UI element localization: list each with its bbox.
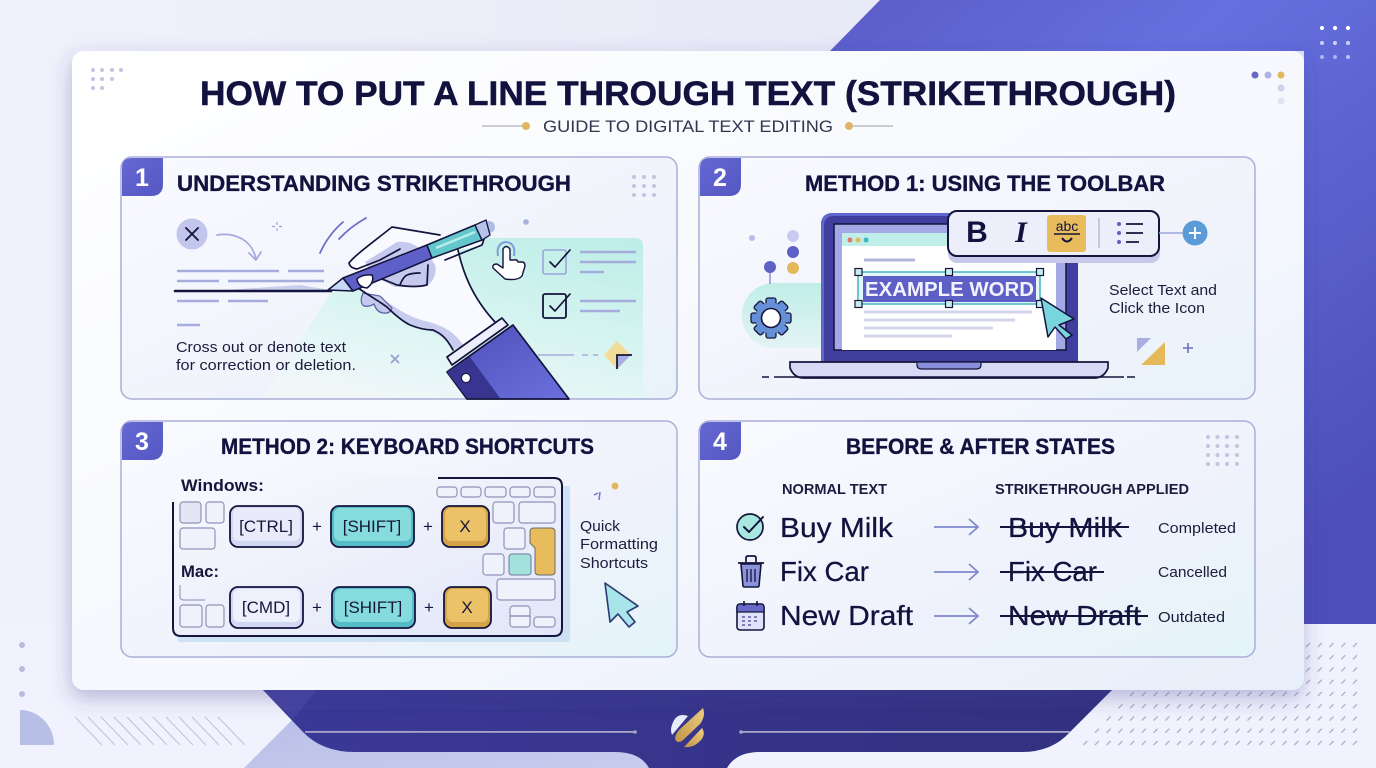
column heading: strikethrough applied: STRIKETHROUGH APPLIED xyxy=(995,481,1189,498)
bottom dark band xyxy=(263,690,1112,768)
badge 2: 2 xyxy=(713,164,727,192)
checklist xyxy=(543,250,636,318)
pen xyxy=(328,220,495,291)
panel 1: understanding strikethrough xyxy=(121,157,677,399)
windows shortcut keys: + xyxy=(312,517,322,536)
text lines with strike xyxy=(175,271,331,325)
cursor arrow xyxy=(1041,298,1074,339)
sparkle xyxy=(272,222,282,231)
selected example word: EXAMPLE WORD xyxy=(865,279,1034,301)
select text caption xyxy=(1109,282,1217,317)
decoration: triangles and plus xyxy=(1137,338,1193,365)
row: fix car: Fix Car xyxy=(1008,556,1097,587)
windows shortcut keys xyxy=(230,506,489,547)
panel 4: before and after states xyxy=(699,421,1255,657)
motion arcs xyxy=(320,218,366,253)
row: new draft: New Draft xyxy=(1008,600,1141,631)
mac shortcut keys: + xyxy=(312,598,322,617)
main card xyxy=(72,51,1304,690)
dot xyxy=(523,219,529,225)
windows shortcut keys: X xyxy=(459,517,471,536)
badge 4: 4 xyxy=(713,428,727,456)
mint background wash xyxy=(263,238,643,398)
badge 2 xyxy=(700,158,741,196)
illustration: shirt cuff and sleeve xyxy=(447,318,569,399)
row: buy milk: Completed xyxy=(1158,520,1236,537)
subtitle: GUIDE TO DIGITAL TEXT EDITING xyxy=(543,117,833,136)
row: new draft xyxy=(737,600,1225,631)
heading 1: UNDERSTANDING STRIKETHROUGH xyxy=(177,171,571,196)
band facet xyxy=(263,690,317,719)
footer logo xyxy=(671,708,704,747)
heading 2: METHOD 1: USING THE TOOLBAR xyxy=(805,171,1165,196)
mac shortcut keys: X xyxy=(461,598,473,617)
label: windows: Windows: xyxy=(181,476,264,495)
select text caption: Select Text and xyxy=(1109,282,1217,299)
subtitle xyxy=(482,117,893,136)
row: buy milk: Buy Milk xyxy=(1008,512,1123,543)
dots grid xyxy=(1206,435,1239,466)
decoration: left dots and quarter circle xyxy=(19,642,54,745)
background purple corner shape xyxy=(830,0,1376,624)
row: fix car: Cancelled xyxy=(1158,564,1227,581)
heading 3: METHOD 2: KEYBOARD SHORTCUTS xyxy=(221,434,594,459)
mac shortcut keys: [SHIFT] xyxy=(344,598,402,617)
mac shortcut keys: + xyxy=(424,598,434,617)
quick formatting caption: Formatting xyxy=(580,536,658,553)
row: buy milk xyxy=(737,512,1236,543)
select text caption: Click the Icon xyxy=(1109,300,1205,317)
hatch pattern: bottom right xyxy=(1078,639,1360,748)
mac shortcut keys xyxy=(230,587,491,628)
badge 4 xyxy=(700,422,741,460)
dots: top right on purple xyxy=(1320,26,1350,59)
icon: pointer hand xyxy=(493,242,525,280)
light shape below band xyxy=(244,712,649,768)
dots cluster xyxy=(749,230,799,284)
gear on mint pill xyxy=(742,283,825,348)
decoration: gold dot and spark xyxy=(594,482,618,500)
background keys xyxy=(180,487,555,627)
band accent lines xyxy=(305,730,1070,734)
windows shortcut keys: [SHIFT] xyxy=(343,517,401,536)
formatting toolbar: B xyxy=(966,216,988,249)
quick formatting caption xyxy=(580,518,658,572)
plus button with connector xyxy=(1159,220,1208,246)
windows shortcut keys: [CTRL] xyxy=(239,517,293,536)
dots grid xyxy=(632,175,656,197)
selected example word xyxy=(855,268,1044,308)
description text xyxy=(176,339,356,374)
row: fix car xyxy=(738,556,1227,587)
row: buy milk: Buy Milk xyxy=(780,512,894,543)
icon: check circle xyxy=(737,514,763,540)
quick formatting caption: Quick xyxy=(580,518,621,535)
icon: x circle xyxy=(176,218,208,250)
row: new draft: Outdated xyxy=(1158,609,1225,626)
badge 3 xyxy=(122,422,163,460)
label: mac: Mac: xyxy=(181,562,219,581)
dots: card top left xyxy=(91,68,123,90)
formatting toolbar xyxy=(948,211,1160,263)
dots: card top right xyxy=(1252,72,1284,104)
small x mark xyxy=(391,355,399,363)
badge 1 xyxy=(122,158,163,196)
windows shortcut keys: + xyxy=(423,517,433,536)
badge 1: 1 xyxy=(135,164,149,192)
row: fix car: Fix Car xyxy=(780,556,869,587)
hatch pattern: bottom left xyxy=(75,717,245,745)
badge 3: 3 xyxy=(135,428,149,456)
formatting toolbar: abc xyxy=(1056,218,1078,234)
heading 4: BEFORE & AFTER STATES xyxy=(846,434,1115,459)
formatting toolbar: I xyxy=(1014,216,1028,249)
laptop xyxy=(762,213,1135,378)
column heading: normal text: NORMAL TEXT xyxy=(782,481,887,498)
description text: Cross out or denote text xyxy=(176,339,347,356)
decoration: dashed line with diamond xyxy=(538,341,632,369)
cursor arrow xyxy=(605,583,638,627)
illustration: hand holding pen xyxy=(328,220,508,350)
panel 2: method 1 toolbar xyxy=(699,157,1255,399)
icon: calendar xyxy=(737,601,764,630)
row: new draft: New Draft xyxy=(780,600,913,631)
mac shortcut keys: [CMD] xyxy=(242,598,290,617)
icon: trash can xyxy=(738,556,764,587)
panel 3: method 2 keyboard shortcuts xyxy=(121,421,677,657)
keyboard body xyxy=(173,478,570,642)
title: HOW TO PUT A LINE THROUGH TEXT (STRIKETHROUGH) xyxy=(200,75,1176,113)
arrow: curve xyxy=(217,234,261,260)
description text: for correction or deletion. xyxy=(176,357,356,374)
quick formatting caption: Shortcuts xyxy=(580,555,648,572)
